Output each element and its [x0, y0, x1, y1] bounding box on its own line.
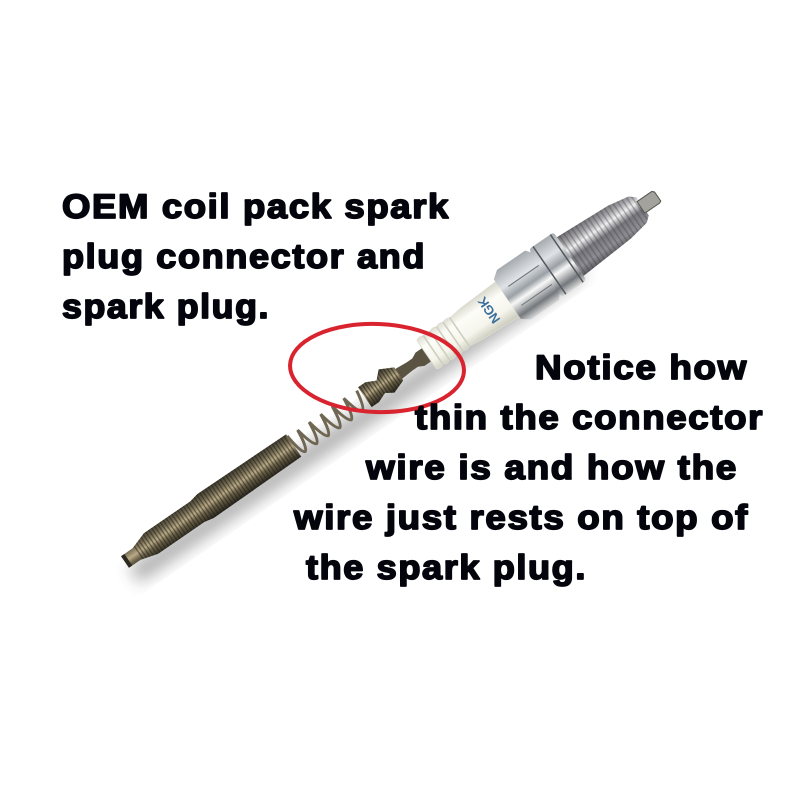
NGK logo on insulator: NGK [474, 294, 503, 326]
caption: notice thin connector wire: thin the connector [415, 399, 764, 437]
caption: OEM connector and spark plug: OEM coil pack spark [62, 188, 450, 226]
caption: notice thin connector wire: Notice how [535, 349, 748, 387]
connector and spark plug photo illustration [121, 190, 662, 568]
spring: loose open coils [287, 389, 369, 455]
connector contact wire [394, 347, 433, 381]
caption: OEM connector and spark plug [62, 188, 450, 326]
caption: OEM connector and spark plug: spark plug. [62, 288, 270, 326]
hex nut [490, 248, 563, 324]
collar [529, 232, 586, 297]
caption: notice thin connector wire: the spark plug. [306, 549, 587, 587]
caption: OEM connector and spark plug: plug connector and [62, 238, 426, 276]
caption: notice thin connector wire: wire just rests on top of [293, 499, 749, 537]
caption: notice thin connector wire: wire is and how the [365, 449, 738, 487]
electrode tip [637, 190, 661, 213]
drop shadow under the plug and connector [129, 262, 585, 583]
red highlight ellipse [289, 321, 465, 415]
caption: notice thin connector wire [293, 349, 764, 587]
coil: upper connector spring with waist [358, 367, 404, 408]
ceramic insulator [415, 281, 521, 372]
coil: lower connector spring [117, 434, 302, 574]
threaded shell [557, 196, 649, 276]
